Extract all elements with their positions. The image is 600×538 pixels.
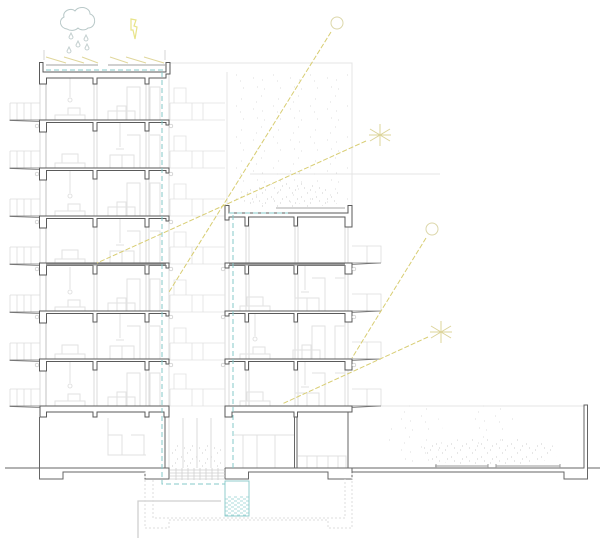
courtyard paving hatch xyxy=(170,468,225,480)
rear volume outline xyxy=(170,63,585,406)
sun ray high xyxy=(169,17,343,292)
rainwater pipes xyxy=(46,70,288,484)
sun ray low xyxy=(352,223,438,358)
water cistern xyxy=(225,481,249,516)
interior walls xyxy=(40,74,348,468)
inner facade wall xyxy=(45,78,47,406)
right block roof xyxy=(225,206,352,227)
left roof xyxy=(40,62,170,84)
right block slabs xyxy=(221,263,356,370)
central balconies xyxy=(170,88,225,406)
furniture: right block xyxy=(240,266,345,406)
right balconies xyxy=(352,246,381,408)
vegetation speckle: rear tree xyxy=(230,72,348,209)
icon: rain cloud xyxy=(60,7,95,53)
furniture: left block xyxy=(55,75,160,406)
vegetation speckle: garden and courtyard xyxy=(172,403,560,467)
left block slabs xyxy=(35,120,173,371)
star ray low xyxy=(282,321,452,404)
icon: sun bolt xyxy=(131,19,137,39)
ground level transfer slabs xyxy=(40,406,352,417)
underground outlines xyxy=(138,472,352,538)
garden planters xyxy=(435,464,560,468)
ground slab and foundations xyxy=(5,405,600,479)
star ray high xyxy=(97,124,391,263)
left balconies xyxy=(10,103,40,408)
left roof planting xyxy=(44,50,165,63)
furniture: ground floor xyxy=(108,418,346,468)
